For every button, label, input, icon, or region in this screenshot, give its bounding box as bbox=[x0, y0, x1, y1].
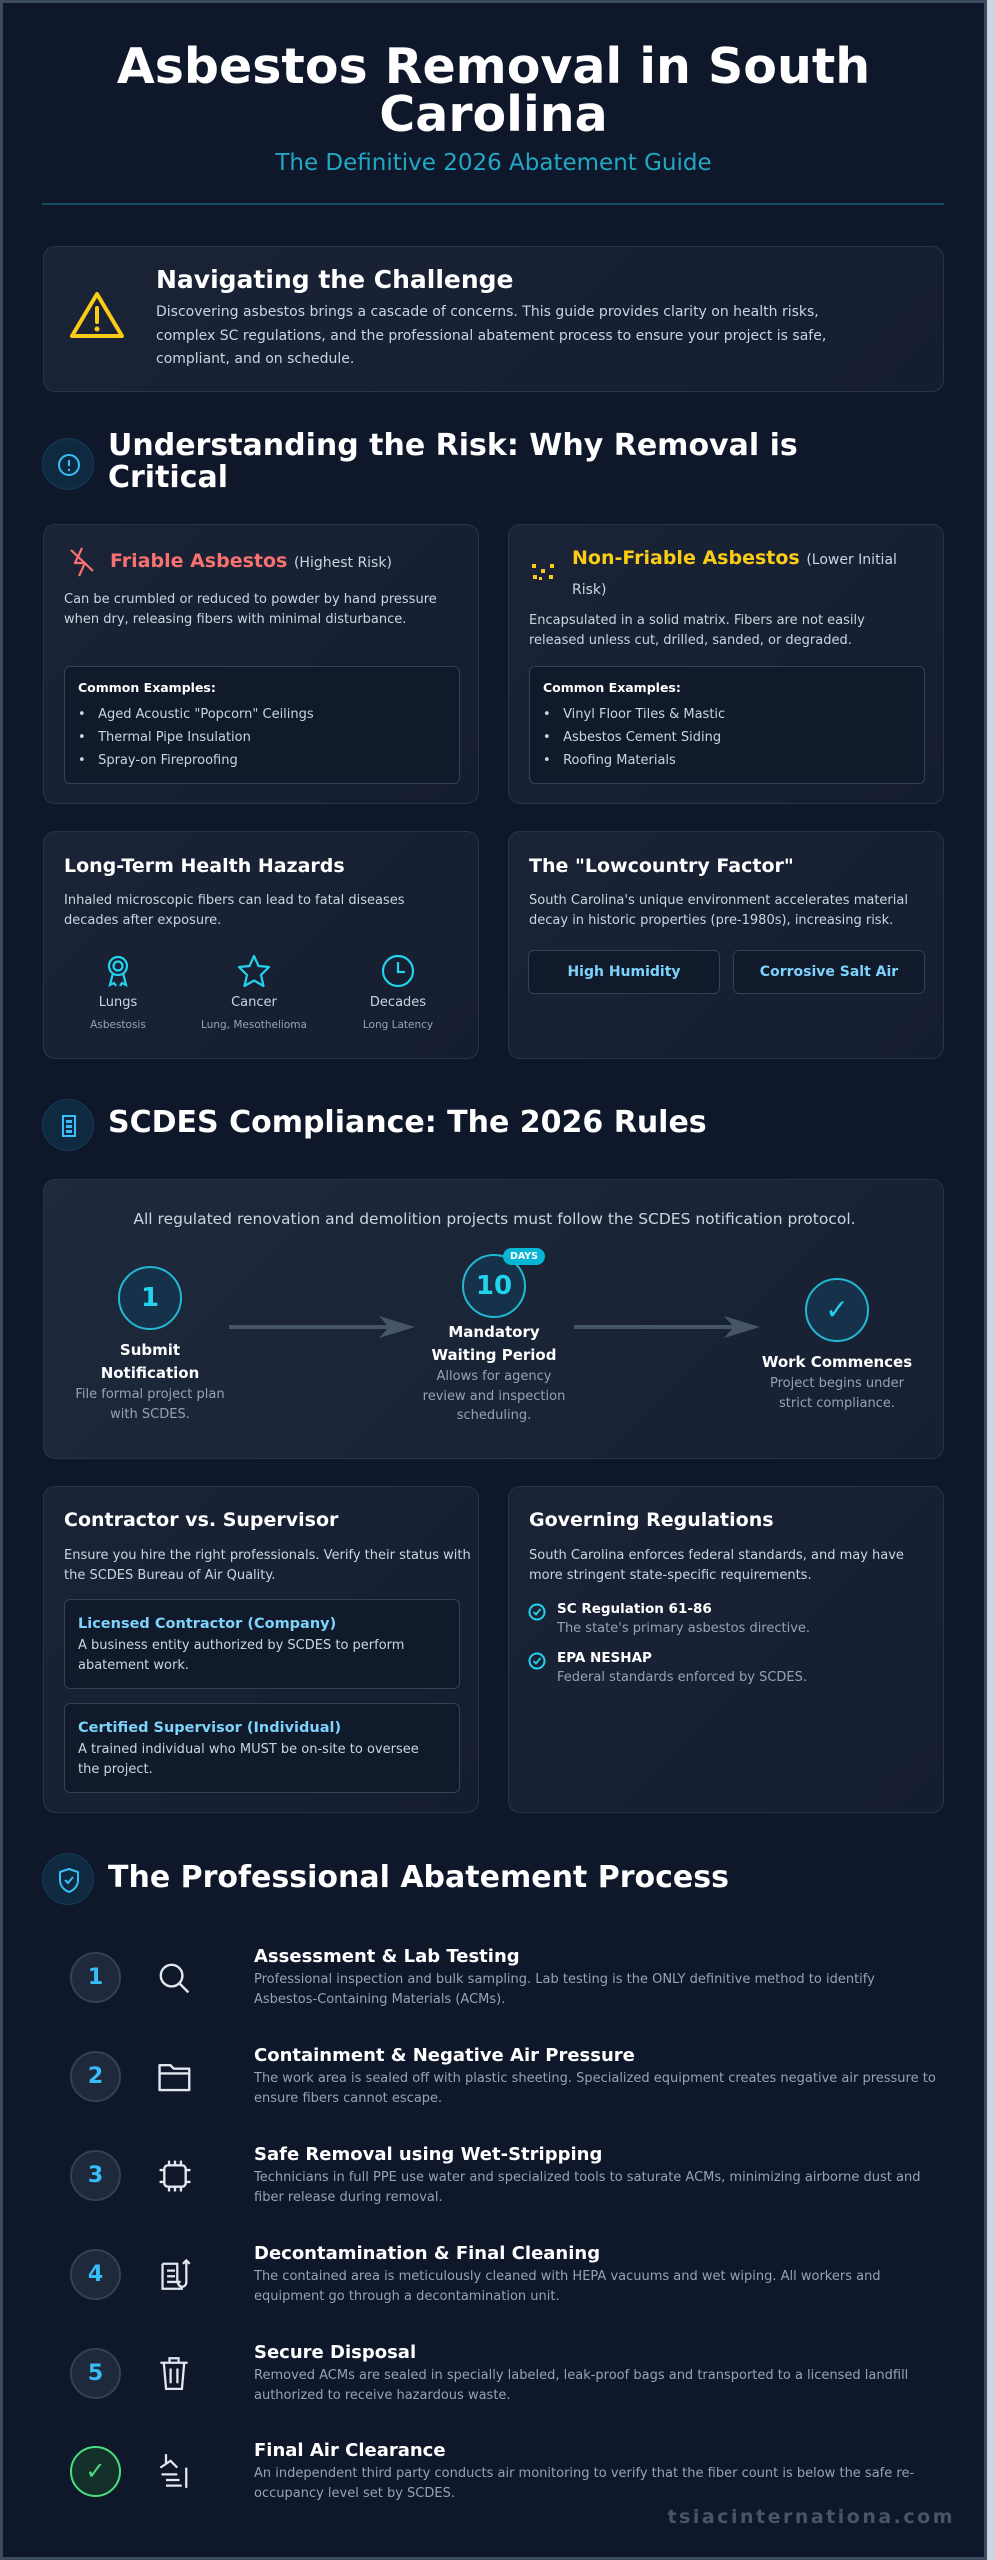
desc: Encapsulated in a solid matrix. Fibers are not easily released unless cut, drilled, sanded, or degraded. bbox=[529, 613, 865, 648]
icon: friable bbox=[70, 548, 94, 576]
icon: lungs bbox=[90, 956, 146, 1031]
step 5 bbox=[70, 2342, 908, 2403]
box: certified supervisor: A trained individual who MUST be on-site to oversee the project. bbox=[78, 1742, 419, 1777]
step 5: Secure Disposal bbox=[254, 2342, 416, 2363]
examples box: • Asbestos Cement Siding bbox=[543, 730, 721, 745]
desc: Can be crumbled or reduced to powder by hand pressure when dry, releasing fibers with minimal disturbance. bbox=[64, 592, 437, 627]
icon: decades: Decades bbox=[370, 995, 426, 1010]
chip: salt air bbox=[733, 950, 925, 994]
examples box: • Spray-on Fireproofing bbox=[78, 753, 238, 768]
examples box: • Roofing Materials bbox=[543, 753, 676, 768]
step 1: 1 bbox=[141, 1283, 159, 1313]
panel: notification protocol: All regulated renovation and demolition projects must follow the SCDES notification protocol. bbox=[133, 1210, 856, 1228]
step 3: 3 bbox=[88, 2163, 103, 2188]
subtitle: The Definitive 2026 Abatement Guide bbox=[275, 150, 712, 176]
chip: humidity bbox=[528, 950, 720, 994]
step 2: DAYS bbox=[510, 1251, 538, 1262]
step 2: 2 bbox=[88, 2064, 103, 2089]
step 2: The work area is sealed off with plastic sheeting. Specialized equipment creates negative air pressure to ensure fibers cannot escape. bbox=[254, 2071, 936, 2106]
step 6: An independent third party conducts air monitoring to verify that the fiber count is below the safe re-occupancy level set by SCDES. bbox=[254, 2466, 914, 2501]
panel: lowcountry factor bbox=[508, 831, 944, 1059]
panel: contractor vs supervisor: Ensure you hire the right professionals. Verify their status with the SCDES Bureau of Air Quality. bbox=[64, 1548, 471, 1583]
panel: health hazards bbox=[43, 831, 479, 1059]
item: epa neshap: Federal standards enforced by SCDES. bbox=[557, 1670, 807, 1685]
text block: Discovering asbestos brings a cascade of concerns. This guide provides clarity on health risks, complex SC regulations, and the professional abatement process to ensure your project is safe, compliant, and on schedule. bbox=[156, 304, 826, 367]
step 4: 4 bbox=[88, 2262, 103, 2287]
panel: health hazards: Long-Term Health Hazards bbox=[64, 855, 345, 877]
heading: understanding the risk: Understanding the Risk: Why Removal is bbox=[108, 428, 798, 463]
icon: lungs: Asbestosis bbox=[90, 1019, 146, 1031]
step 1 bbox=[70, 1946, 875, 2007]
step 1: Professional inspection and bulk sampling. Lab testing is the ONLY definitive method to identify Asbestos-Containing Materials (ACMs). bbox=[254, 1972, 875, 2007]
heading: scdes: SCDES Compliance: The 2026 Rules bbox=[108, 1105, 707, 1140]
step 2: Containment & Negative Air Pressure bbox=[254, 2045, 635, 2066]
item: sc regulation: The state's primary asbestos directive. bbox=[557, 1621, 810, 1636]
heading: understanding the risk: Critical bbox=[108, 460, 228, 495]
panel: lowcountry factor: The "Lowcountry Factor" bbox=[529, 855, 794, 877]
title: Carolina bbox=[379, 86, 608, 143]
title: Asbestos Removal in South bbox=[117, 38, 870, 95]
panel: navigating the challenge bbox=[43, 246, 944, 392]
item: sc regulation: SC Regulation 61-86 bbox=[557, 1601, 712, 1617]
step 3: ✓ bbox=[825, 1293, 849, 1326]
chip: humidity: High Humidity bbox=[567, 964, 681, 980]
title: Non-Friable Asbestos (Lower Initial Risk) bbox=[572, 547, 897, 598]
icon: section risk bbox=[42, 438, 94, 490]
icon: section process bbox=[42, 1853, 94, 1905]
icon: cancer bbox=[201, 954, 307, 1031]
step 4: Decontamination & Final Cleaning bbox=[254, 2243, 600, 2264]
step 6: Final Air Clearance bbox=[254, 2440, 446, 2461]
icon: section scdes bbox=[42, 1099, 94, 1151]
examples box: Common Examples: bbox=[543, 680, 681, 695]
item: epa neshap bbox=[528, 1650, 807, 1685]
panel: non-friable bbox=[508, 524, 944, 804]
step 3 bbox=[70, 2144, 920, 2205]
panel: governing regulations: Governing Regulations bbox=[529, 1509, 774, 1531]
box: licensed contractor bbox=[64, 1599, 460, 1689]
step 3: Safe Removal using Wet-Stripping bbox=[254, 2144, 602, 2165]
icon: decades: Long Latency bbox=[363, 1019, 433, 1031]
step 5: 5 bbox=[88, 2361, 103, 2386]
step 2: Waiting Period bbox=[432, 1346, 556, 1364]
step 6 bbox=[70, 2440, 914, 2501]
step 1: Submit bbox=[120, 1341, 180, 1359]
step 1 bbox=[75, 1266, 225, 1422]
examples box: • Vinyl Floor Tiles & Mastic bbox=[543, 707, 725, 722]
step 2: Allows for agency review and inspection scheduling. bbox=[423, 1369, 565, 1423]
item: epa neshap: EPA NESHAP bbox=[557, 1650, 652, 1666]
step 2: Mandatory bbox=[448, 1323, 540, 1341]
panel: governing regulations bbox=[508, 1486, 944, 1813]
step 1: Notification bbox=[101, 1364, 199, 1382]
watermark: tsiacinternationa.com bbox=[667, 2506, 955, 2528]
step 1: Assessment & Lab Testing bbox=[254, 1946, 520, 1967]
panel: notification protocol bbox=[43, 1179, 944, 1459]
panel: contractor vs supervisor bbox=[43, 1486, 479, 1813]
icon: decades bbox=[363, 954, 433, 1031]
step 2 bbox=[70, 2045, 936, 2106]
step 3 bbox=[762, 1278, 912, 1410]
step 1: 1 bbox=[88, 1965, 103, 1990]
arrow 1 bbox=[229, 1316, 414, 1338]
icon: cancer: Cancer bbox=[231, 995, 277, 1010]
step 4 bbox=[70, 2243, 881, 2304]
examples box bbox=[64, 666, 460, 784]
examples box: • Aged Acoustic "Popcorn" Ceilings bbox=[78, 707, 314, 722]
icon: non-friable bbox=[532, 564, 554, 580]
arrow 2 bbox=[574, 1316, 760, 1338]
title bbox=[117, 38, 870, 143]
examples box: Common Examples: bbox=[78, 680, 216, 695]
icon: lungs: Lungs bbox=[99, 995, 137, 1010]
step 6: ✓ bbox=[85, 2457, 106, 2485]
step 4: The contained area is meticulously cleaned with HEPA vacuums and wet wiping. All workers and equipment go through a decontamination unit. bbox=[254, 2269, 881, 2304]
icon: warning bbox=[70, 292, 124, 338]
panel: lowcountry factor: South Carolina's unique environment accelerates material decay in historic properties (pre-1980s), increasing risk. bbox=[529, 893, 908, 928]
item: sc regulation bbox=[528, 1601, 810, 1636]
heading: Navigating the Challenge bbox=[156, 265, 514, 294]
box: licensed contractor: Licensed Contractor (Company) bbox=[78, 1616, 336, 1632]
step 5: Removed ACMs are sealed in specially labeled, leak-proof bags and transported to a licensed landfill authorized to receive hazardous waste. bbox=[254, 2368, 908, 2403]
chip: salt air: Corrosive Salt Air bbox=[760, 964, 898, 980]
examples box bbox=[529, 666, 925, 784]
step 1: File formal project plan with SCDES. bbox=[75, 1387, 225, 1422]
panel: governing regulations: South Carolina enforces federal standards, and may have more stringent state-specific requirements. bbox=[529, 1548, 904, 1583]
step 2: 10 bbox=[476, 1271, 512, 1301]
panel: health hazards: Inhaled microscopic fibers can lead to fatal diseases decades after exposure. bbox=[64, 893, 405, 928]
box: certified supervisor bbox=[64, 1703, 460, 1793]
box: licensed contractor: A business entity authorized by SCDES to perform abatement work. bbox=[78, 1638, 404, 1673]
step 3: Technicians in full PPE use water and specialized tools to saturate ACMs, minimizing airborne dust and fiber release during removal. bbox=[254, 2170, 920, 2205]
step 3: Work Commences bbox=[762, 1353, 912, 1371]
heading: understanding the risk bbox=[108, 428, 798, 495]
panel: contractor vs supervisor: Contractor vs. Supervisor bbox=[64, 1509, 338, 1531]
heading: process: The Professional Abatement Process bbox=[108, 1860, 729, 1895]
examples box: • Thermal Pipe Insulation bbox=[78, 730, 251, 745]
icon: cancer: Lung, Mesothelioma bbox=[201, 1019, 307, 1031]
title: Friable Asbestos (Highest Risk) bbox=[110, 550, 392, 572]
step 2 bbox=[423, 1248, 565, 1423]
step 3: Project begins under strict compliance. bbox=[770, 1376, 904, 1410]
panel: friable bbox=[43, 524, 479, 804]
box: certified supervisor: Certified Supervisor (Individual) bbox=[78, 1720, 341, 1736]
